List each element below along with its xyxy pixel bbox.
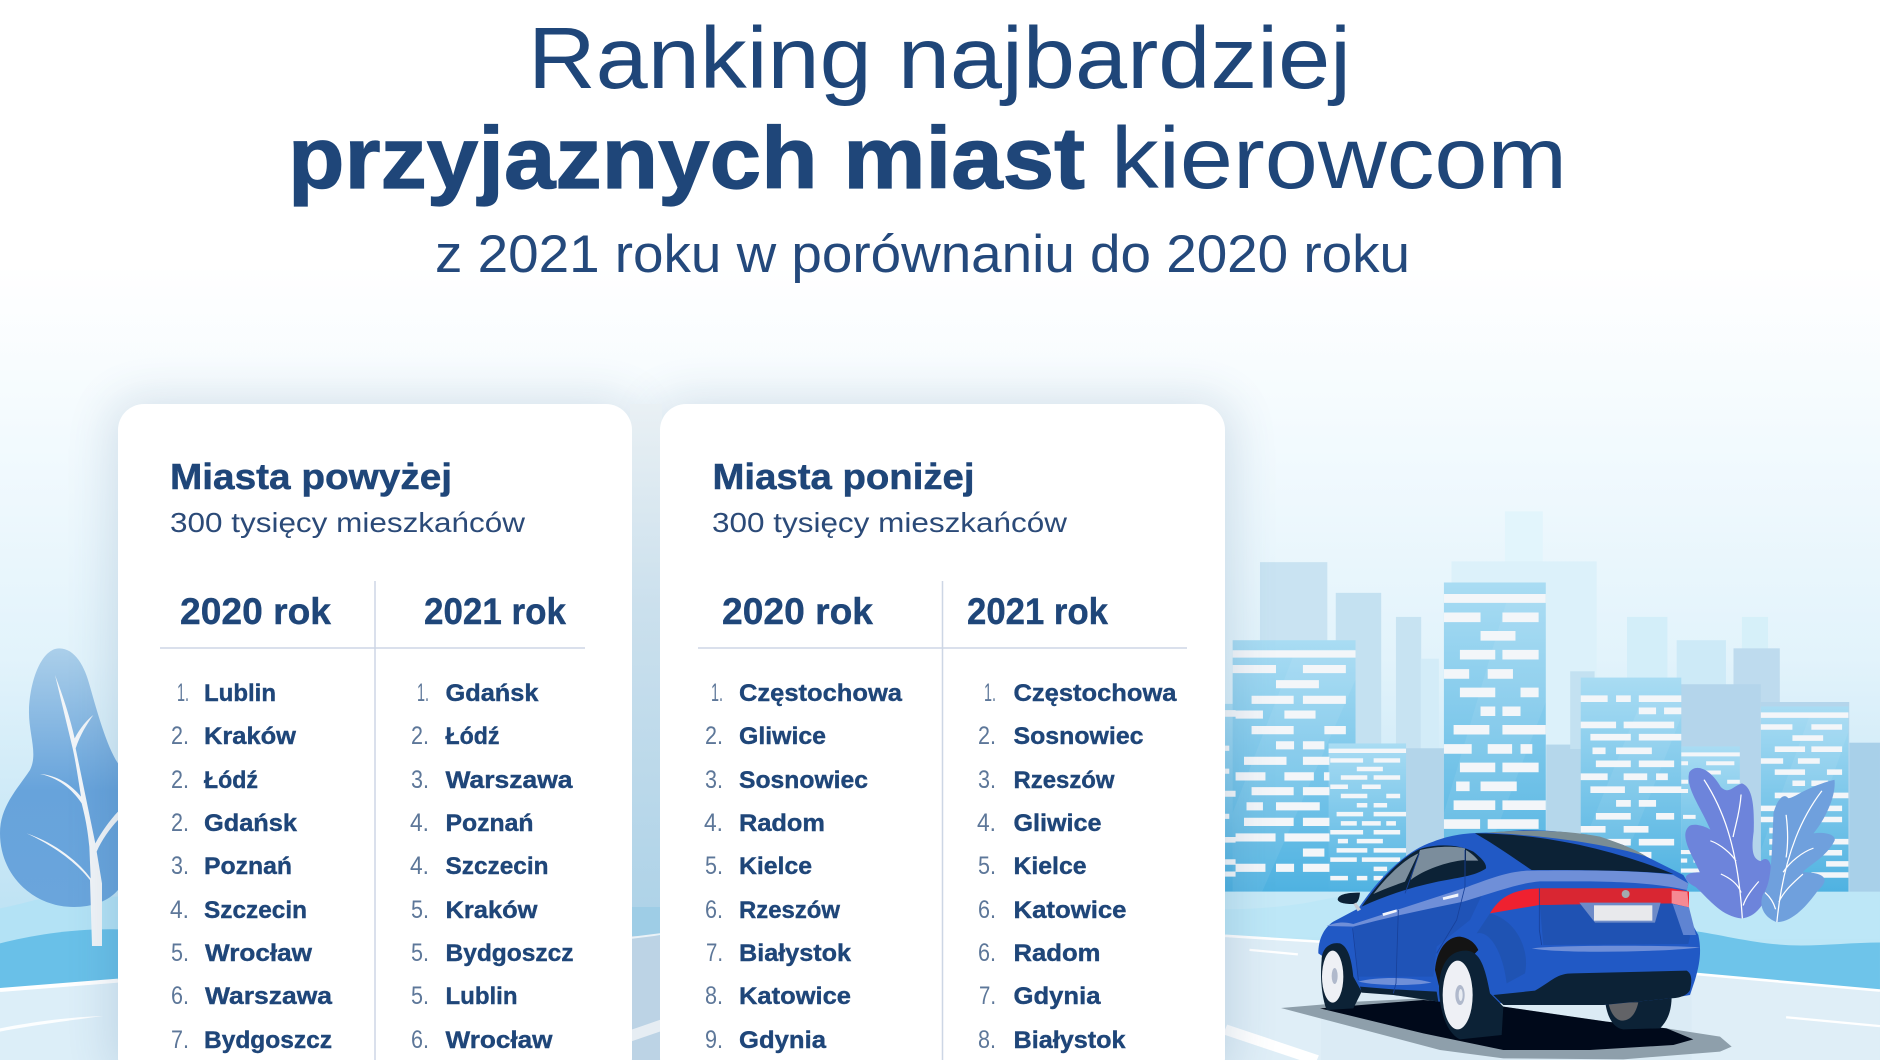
column headers: 2021 rok — [967, 591, 1108, 632]
gap between cards — [630, 404, 662, 1060]
list: 2020 ranking: Rzeszów — [739, 897, 841, 924]
list: 2021 ranking: 5. — [978, 852, 996, 880]
list: 2021 ranking: Rzeszów — [1014, 767, 1115, 794]
list: 2021 ranking: 4. — [977, 809, 996, 837]
column headers — [180, 591, 566, 632]
hills — [0, 897, 118, 1060]
subtitle: z 2021 roku w porównaniu do 2020 roku — [435, 225, 1410, 284]
list: 2020 ranking: 4. — [704, 809, 723, 837]
list: 2021 ranking: 3. — [978, 766, 996, 794]
list: 2021 ranking: 5. — [411, 939, 429, 967]
list: 2020 ranking: Lublin — [204, 680, 276, 707]
list: 2020 ranking: 2. — [171, 809, 189, 837]
list: 2021 ranking: Warszawa — [446, 767, 573, 794]
list: 2021 ranking: Bydgoszcz — [446, 940, 574, 967]
list: 2021 ranking: 6. — [411, 1026, 429, 1054]
column headers — [722, 591, 1108, 632]
list: 2020 ranking: Warszawa — [205, 983, 332, 1010]
list: 2020 ranking: 2. — [171, 722, 189, 750]
list: 2021 ranking: Lublin — [446, 983, 518, 1010]
list: 2020 ranking: Częstochowa — [739, 680, 902, 707]
list: 2021 ranking: Gdynia — [1014, 983, 1101, 1010]
tree and left landscape — [0, 648, 118, 1060]
icon: tree crown — [0, 648, 118, 907]
list: 2021 ranking: 2. — [411, 722, 429, 750]
list: 2020 ranking: Radom — [739, 810, 825, 837]
list: 2021 ranking: 6. — [978, 939, 996, 967]
list: 2020 ranking: 5. — [171, 939, 189, 967]
ground and road — [640, 892, 1880, 1060]
list: 2020 ranking: 9. — [705, 1026, 723, 1054]
list: 2021 ranking: 4. — [410, 852, 429, 880]
list: 2021 ranking: Poznań — [446, 810, 534, 837]
list: 2021 ranking: 5. — [411, 896, 429, 924]
list: 2020 ranking: 1. — [177, 679, 189, 707]
list: 2020 ranking: 2. — [705, 722, 723, 750]
list: 2020 ranking: 4. — [170, 896, 189, 924]
list: 2020 ranking — [704, 679, 902, 1054]
list: 2021 ranking: Gliwice — [1014, 810, 1102, 837]
list: 2021 ranking: Wrocław — [446, 1027, 554, 1054]
list: 2021 ranking: Kielce — [1014, 853, 1086, 880]
list: 2020 ranking: Szczecin — [204, 897, 307, 924]
list: 2020 ranking: Bydgoszcz — [204, 1027, 332, 1054]
card heading: Miasta poniżej — [712, 456, 974, 497]
list: 2020 ranking: Poznań — [204, 853, 292, 880]
list: 2021 ranking: Łódź — [446, 723, 500, 750]
list: 2021 ranking: 2. — [978, 722, 996, 750]
list: 2021 ranking — [410, 679, 574, 1054]
list: 2021 ranking: 6. — [978, 896, 996, 924]
icon: blue car — [1281, 830, 1732, 1059]
building windows — [1225, 594, 1848, 880]
list: 2021 ranking: 3. — [411, 766, 429, 794]
list: 2021 ranking: 1. — [984, 679, 996, 707]
list: 2020 ranking: 6. — [171, 982, 189, 1010]
title: przyjaznych miast — [288, 110, 1085, 207]
card subheading: 300 tysięcy mieszkańców — [170, 507, 526, 538]
list: 2020 ranking: Gliwice — [739, 723, 826, 750]
icon: plants — [1685, 768, 1835, 922]
list: 2020 ranking: Wrocław — [205, 940, 313, 967]
list: 2021 ranking: Kraków — [446, 897, 538, 924]
list: 2021 ranking: Radom — [1014, 940, 1100, 967]
list: 2021 ranking: Białystok — [1014, 1027, 1126, 1054]
list: 2020 ranking: 7. — [171, 1026, 189, 1054]
list: 2020 ranking: 7. — [706, 939, 723, 967]
list: 2021 ranking: 1. — [417, 679, 429, 707]
column headers: 2020 rok — [722, 591, 873, 632]
list: 2020 ranking: 2. — [171, 766, 189, 794]
list: 2020 ranking: Kielce — [739, 853, 812, 880]
list: 2020 ranking: 6. — [705, 896, 723, 924]
list: 2020 ranking: 3. — [705, 766, 723, 794]
list: 2020 ranking: 8. — [705, 982, 723, 1010]
icon: tree trunk and branches — [27, 675, 118, 946]
list: 2020 ranking: Łódź — [204, 767, 258, 794]
list: 2020 ranking: Katowice — [739, 983, 851, 1010]
column headers: 2020 rok — [180, 591, 331, 632]
list: 2020 ranking: Białystok — [739, 940, 851, 967]
title — [288, 10, 1567, 207]
card heading: Miasta powyżej — [170, 456, 452, 497]
list: 2020 ranking: Kraków — [204, 723, 297, 750]
panel: cities above 300 thousand residents — [118, 404, 632, 1060]
front buildings — [1225, 582, 1848, 892]
far buildings — [1260, 511, 1880, 893]
list: 2021 ranking: 5. — [411, 982, 429, 1010]
list: 2021 ranking: Gdańsk — [446, 680, 539, 707]
column headers: 2021 rok — [424, 591, 566, 632]
shadow: card 2 — [654, 400, 1232, 1060]
card subheading: 300 tysięcy mieszkańców — [712, 507, 1068, 538]
title: kierowcom — [1111, 110, 1567, 207]
list: 2021 ranking: Katowice — [1014, 897, 1126, 924]
list: 2020 ranking — [170, 679, 332, 1054]
list: 2020 ranking: 1. — [711, 679, 723, 707]
list: 2021 ranking: Szczecin — [446, 853, 548, 880]
title: Ranking najbardziej — [528, 10, 1351, 107]
list: 2021 ranking: 4. — [410, 809, 429, 837]
list: 2020 ranking: Sosnowiec — [739, 767, 868, 794]
list: 2021 ranking: 7. — [979, 982, 996, 1010]
hills and road edge — [1225, 892, 1880, 1060]
list: 2021 ranking: 8. — [978, 1026, 996, 1054]
list: 2021 ranking: Sosnowiec — [1014, 723, 1144, 750]
city skyline — [1225, 511, 1880, 1060]
list: 2021 ranking: Częstochowa — [1014, 680, 1177, 707]
list: 2020 ranking: Gdynia — [739, 1027, 826, 1054]
list: 2020 ranking: 5. — [705, 852, 723, 880]
list: 2020 ranking: 3. — [171, 852, 189, 880]
list: 2020 ranking: Gdańsk — [204, 810, 297, 837]
panel: cities below 300 thousand residents — [660, 404, 1225, 1060]
shadow: card 1 — [112, 400, 638, 1060]
list: 2021 ranking — [977, 679, 1177, 1054]
